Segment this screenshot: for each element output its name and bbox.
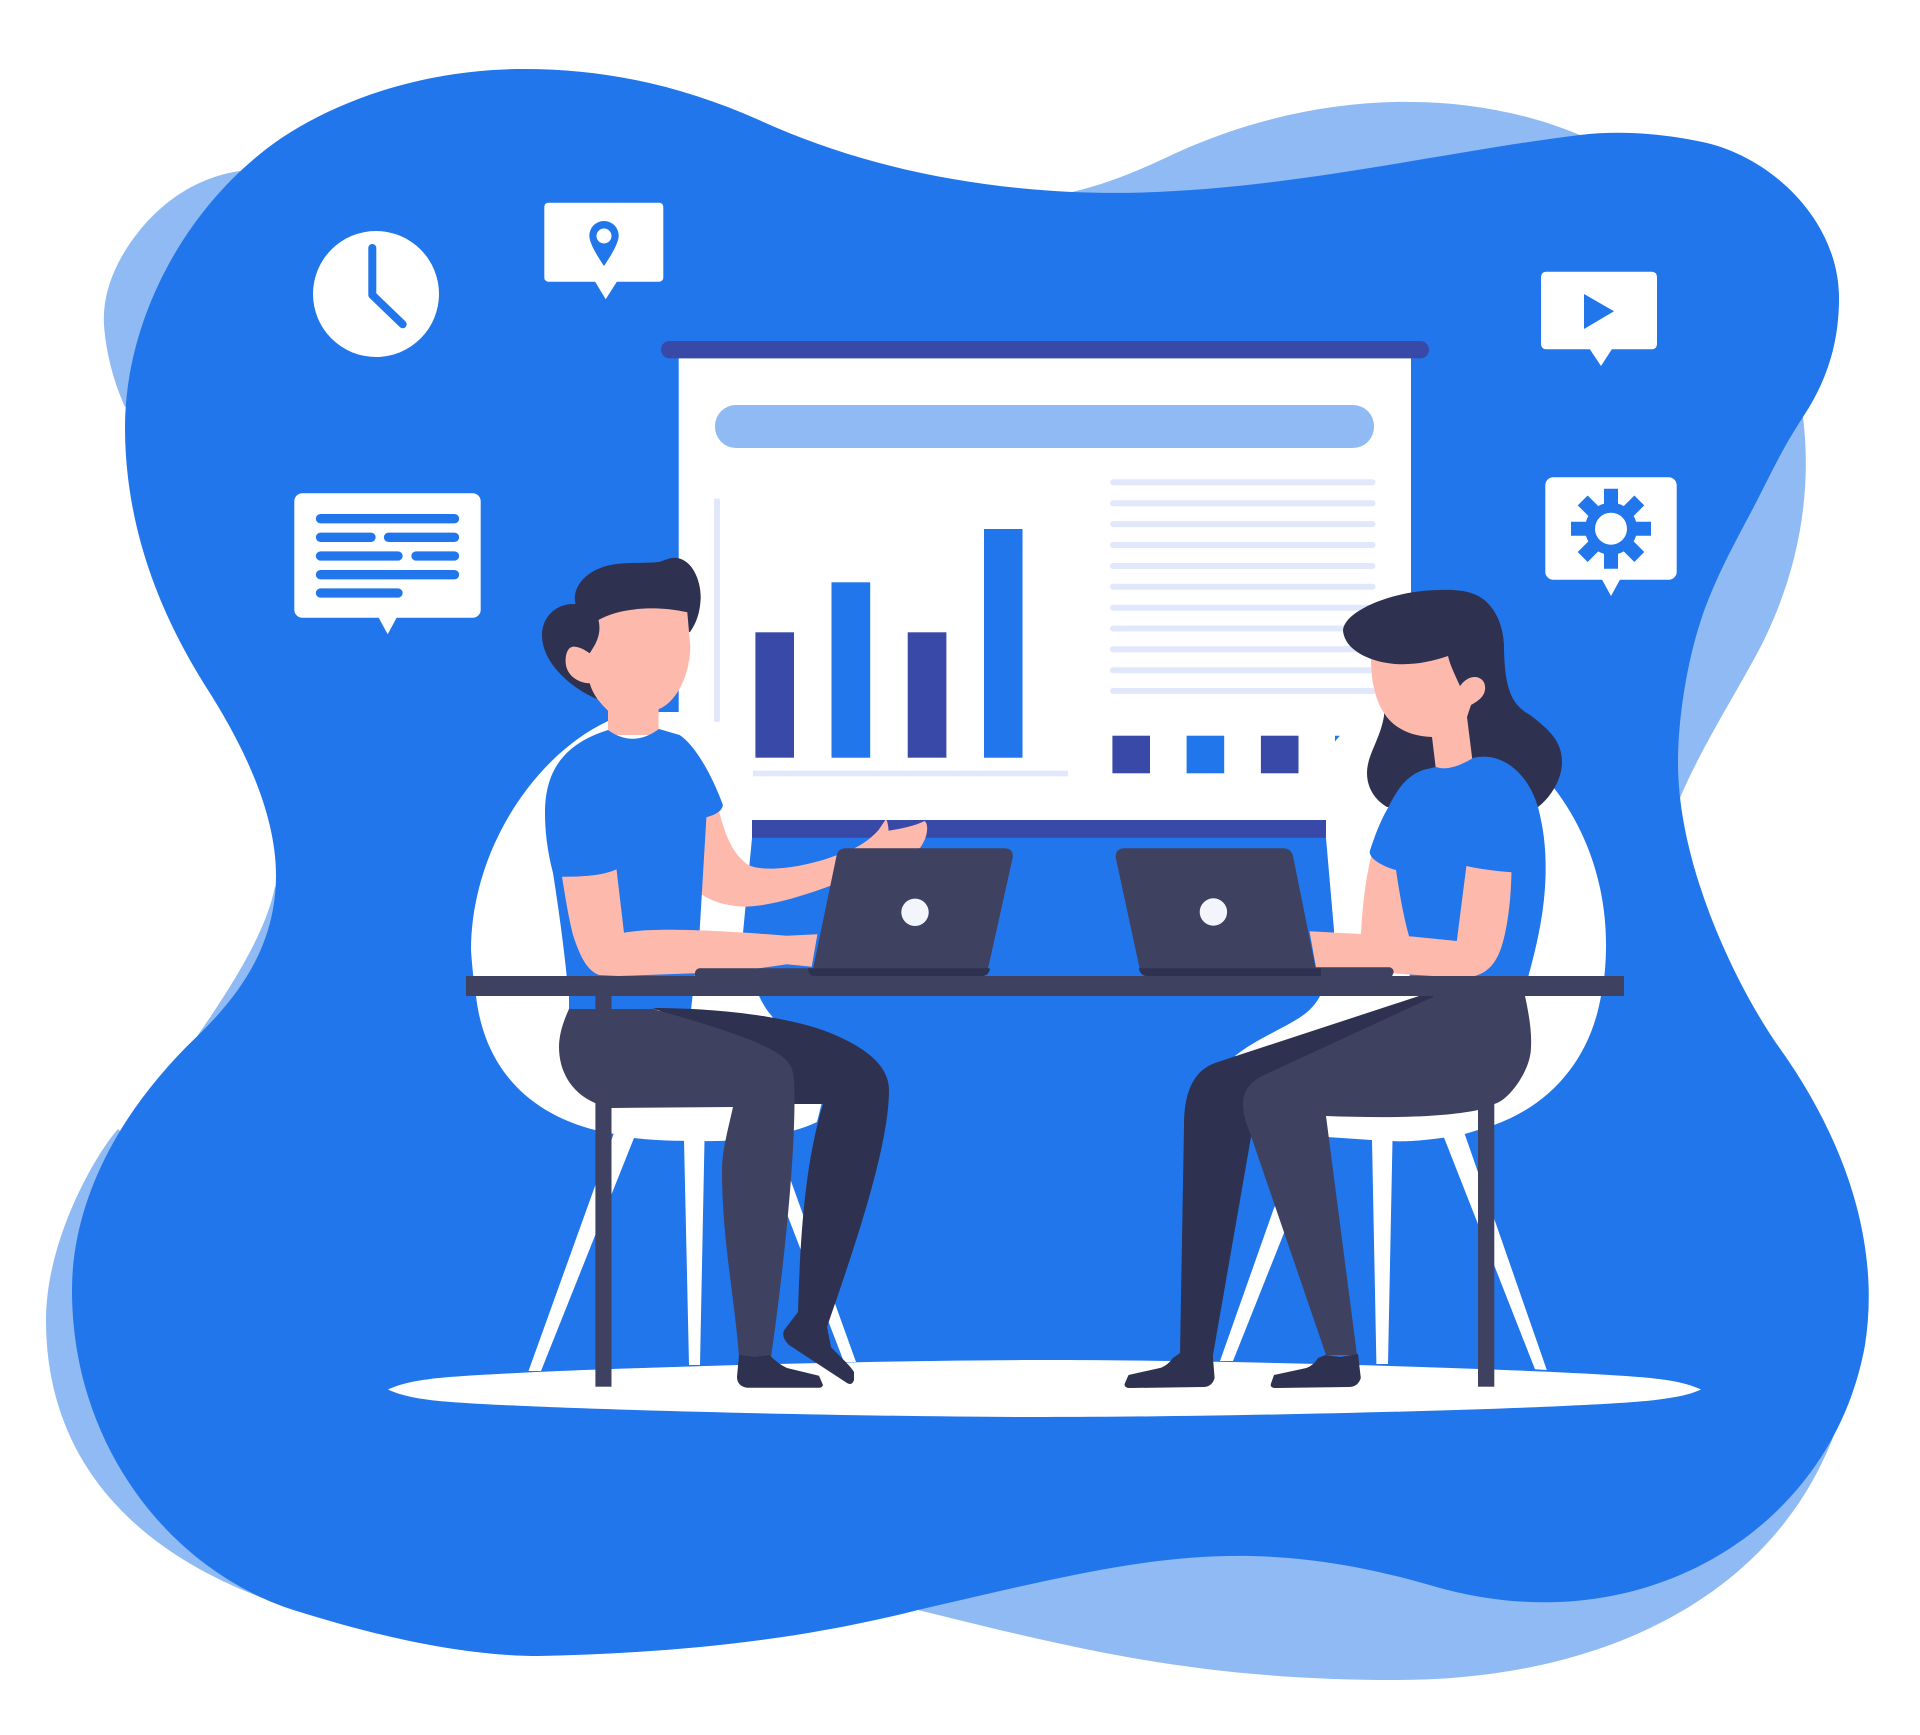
screen top rail — [661, 341, 1429, 358]
laptop lid — [1116, 848, 1316, 970]
laptop logo — [901, 899, 929, 926]
legend square fragment — [1335, 736, 1340, 742]
light blob lower left — [46, 1129, 400, 1612]
screen bottom rail — [752, 820, 1326, 838]
man laptop — [695, 848, 1013, 976]
icon: location pin card — [544, 203, 663, 299]
man hair — [542, 558, 701, 699]
man back leg and foot — [653, 1008, 889, 1384]
vertical axis — [714, 498, 720, 722]
woman fringe — [1343, 590, 1504, 686]
man front arm — [562, 869, 817, 976]
man upper body — [542, 558, 927, 1010]
woman back arm — [1361, 855, 1412, 940]
light sliver left — [197, 886, 280, 1037]
light blob top left — [104, 171, 300, 407]
man back arm — [695, 811, 927, 907]
icon: clock — [313, 231, 439, 357]
icon: settings gear card — [1545, 477, 1677, 596]
man shirt — [545, 729, 723, 1010]
woman shirt — [1370, 757, 1546, 976]
woman face and neck — [1371, 650, 1485, 770]
woman right foot — [1271, 1354, 1361, 1388]
man face and neck — [566, 608, 690, 735]
light blob bottom — [918, 1400, 1843, 1680]
woman back hair — [1367, 599, 1562, 807]
laptop logo — [1200, 898, 1227, 926]
man legs — [559, 1008, 889, 1388]
man front leg — [559, 1009, 794, 1357]
woman left foot — [1125, 1353, 1215, 1388]
laptop base — [695, 968, 812, 976]
left chair — [471, 712, 856, 1371]
laptop lid — [813, 848, 1013, 970]
woman front leg — [1243, 996, 1531, 1355]
light blob top — [1072, 102, 1580, 300]
woman upper body — [1310, 590, 1562, 976]
right chair — [1220, 720, 1606, 1370]
table top — [466, 976, 1624, 996]
presentation screen — [661, 341, 1429, 838]
legend squares — [1112, 736, 1298, 773]
woman legs — [1125, 996, 1531, 1388]
screen surface — [679, 350, 1411, 820]
woman front arm — [1310, 866, 1512, 976]
woman laptop — [1116, 848, 1394, 976]
icon: video play card — [1541, 272, 1657, 366]
man front foot — [737, 1355, 823, 1388]
screen header pill — [715, 405, 1374, 448]
bar chart — [753, 529, 1068, 776]
table legs — [595, 990, 1494, 1387]
icon: text message card — [294, 493, 481, 634]
light blob right — [1500, 417, 1806, 798]
floor ellipse — [388, 1360, 1701, 1417]
text lines — [1113, 482, 1372, 691]
laptop base — [1316, 967, 1394, 976]
woman back leg — [1180, 996, 1435, 1355]
